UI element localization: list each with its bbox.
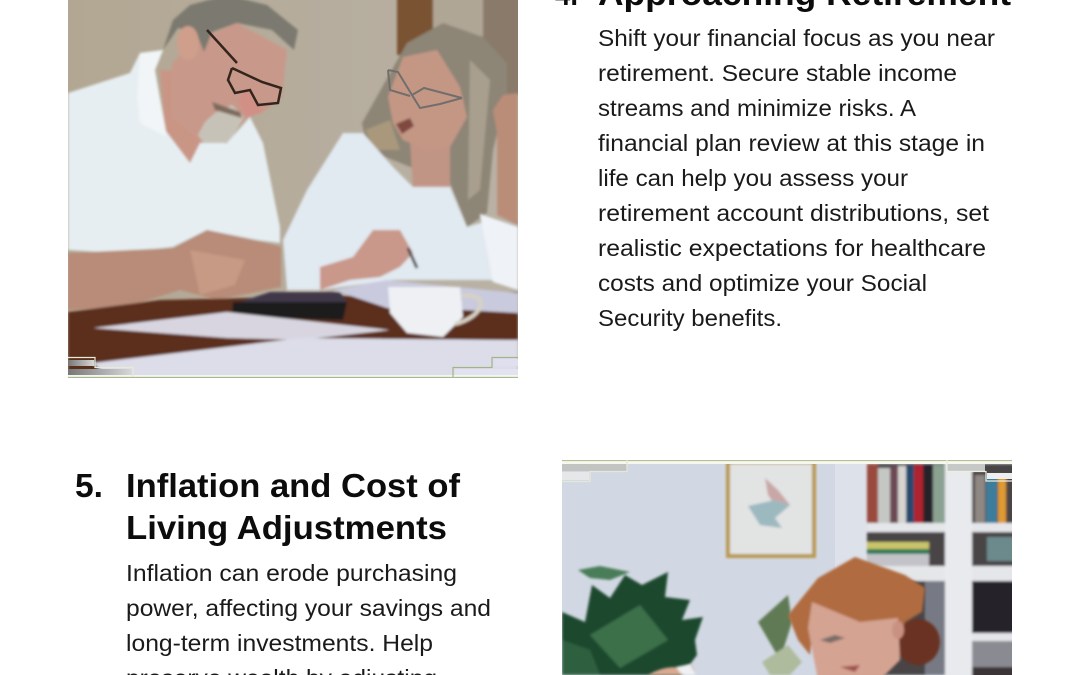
man's hair: [163, 0, 298, 52]
section 5 number and heading: [75, 467, 461, 546]
section 5 number and heading: 5.: [75, 467, 103, 504]
framed bird picture: [728, 462, 814, 556]
section 4 body text: [598, 25, 995, 331]
corner ornaments: [562, 460, 1012, 482]
section 5 number and heading: Living Adjustments: [126, 509, 447, 546]
section 5 body text: long-term investments. Help: [126, 630, 433, 656]
woman's neck and blouse: [410, 140, 450, 190]
man's beard: [198, 105, 244, 145]
bookshelves: [867, 458, 1017, 675]
papers: [93, 312, 390, 340]
photo: worried woman at home reading a bill: [562, 458, 1017, 675]
man's white shirt: [68, 50, 280, 253]
plants: [562, 566, 802, 675]
woman's hair, face and hand: [648, 557, 940, 675]
section 5 body text: power, affecting your savings and: [126, 595, 491, 621]
woman's hair: [362, 23, 507, 227]
section 5 body text: Inflation can erode purchasing: [126, 560, 457, 586]
section 5 body text: [126, 560, 491, 675]
section 4 body text: streams and minimize risks. A: [598, 95, 916, 121]
corner ornaments: [68, 358, 518, 378]
woman's hand with pen: [320, 230, 413, 290]
table: [68, 292, 518, 378]
laptop: [333, 280, 518, 313]
section 4 body text: financial plan review at this stage in: [598, 130, 985, 156]
woman's glasses: [388, 70, 462, 108]
section 5 number and heading: Inflation and Cost of: [126, 467, 461, 504]
man's neck: [160, 70, 205, 165]
man's arm and hand: [68, 230, 281, 310]
man's face: [172, 22, 287, 126]
section 4 body text: retirement account distributions, set: [598, 200, 989, 226]
photo: older couple reviewing finances at a table: [68, 0, 523, 378]
coffee cup: [388, 287, 463, 337]
section 4 body text: retirement. Secure stable income: [598, 60, 957, 86]
section 4 body text: life can help you assess your: [598, 165, 908, 191]
man's glasses: [207, 30, 281, 105]
section 4 body text: Shift your financial focus as you near: [598, 25, 995, 51]
woman's face: [388, 50, 467, 150]
section 4 body text: Security benefits.: [598, 305, 782, 331]
woman's forearm and raised hand: [493, 93, 518, 225]
section 4 body text: realistic expectations for healthcare: [598, 235, 986, 261]
tablet: [232, 302, 347, 320]
section 4 body text: costs and optimize your Social: [598, 270, 927, 296]
